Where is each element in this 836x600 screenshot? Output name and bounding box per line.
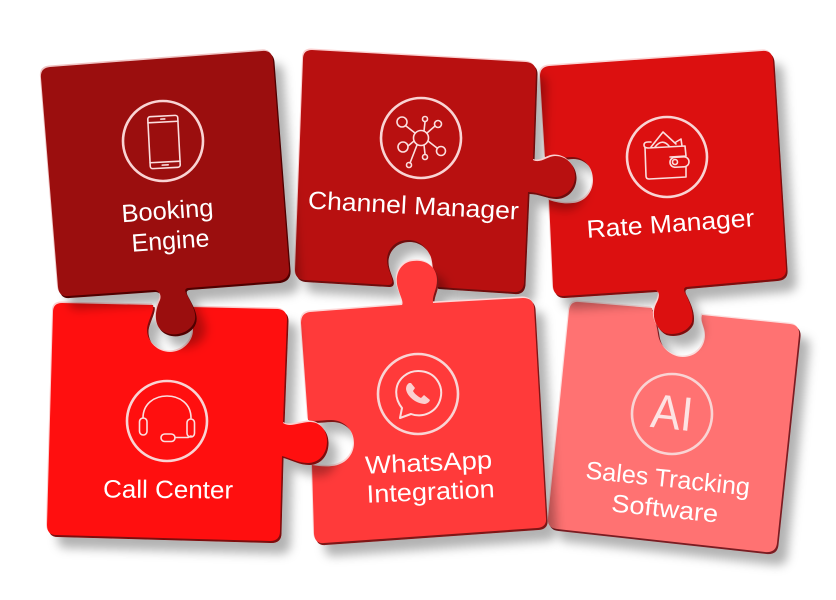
text: sales tracking software (584, 456, 751, 529)
icon: network (381, 98, 461, 178)
puzzle piece: channel manager (295, 50, 575, 292)
icon: smartphone (123, 101, 203, 181)
icon: AI (632, 374, 712, 454)
text: rate manager: Rate Manager (586, 204, 755, 244)
icon: headset (127, 381, 207, 461)
puzzle piece: whatsapp (301, 261, 546, 543)
panel: rate manager (539, 49, 788, 336)
panel: channel manager (294, 48, 576, 294)
text: booking engine: Booking (121, 194, 214, 228)
text: booking engine: Engine (131, 224, 210, 258)
icon: wallet (627, 117, 707, 197)
text: whatsapp integration: WhatsApp (365, 446, 493, 480)
text: booking engine (121, 194, 214, 258)
puzzle piece: sales tracking (548, 302, 799, 552)
puzzle piece: call center (47, 303, 327, 541)
icon: whatsapp (378, 354, 458, 434)
text: sales tracking software: Sales Tracking (584, 456, 751, 502)
panel: sales tracking software (547, 300, 801, 554)
text: channel manager: Channel Manager (307, 187, 520, 226)
panel: call center (46, 302, 328, 543)
puzzle piece: booking engine (41, 51, 289, 334)
panel: whatsapp integration (300, 259, 548, 545)
icon: AI: AI (648, 385, 696, 442)
text: whatsapp integration: Integration (366, 475, 495, 509)
text: call center: Call Center (103, 475, 233, 505)
text: sales tracking software: Software (610, 490, 720, 529)
text: whatsapp integration (365, 446, 495, 509)
panel: booking engine (40, 49, 291, 336)
puzzle piece: rate manager (540, 51, 786, 334)
